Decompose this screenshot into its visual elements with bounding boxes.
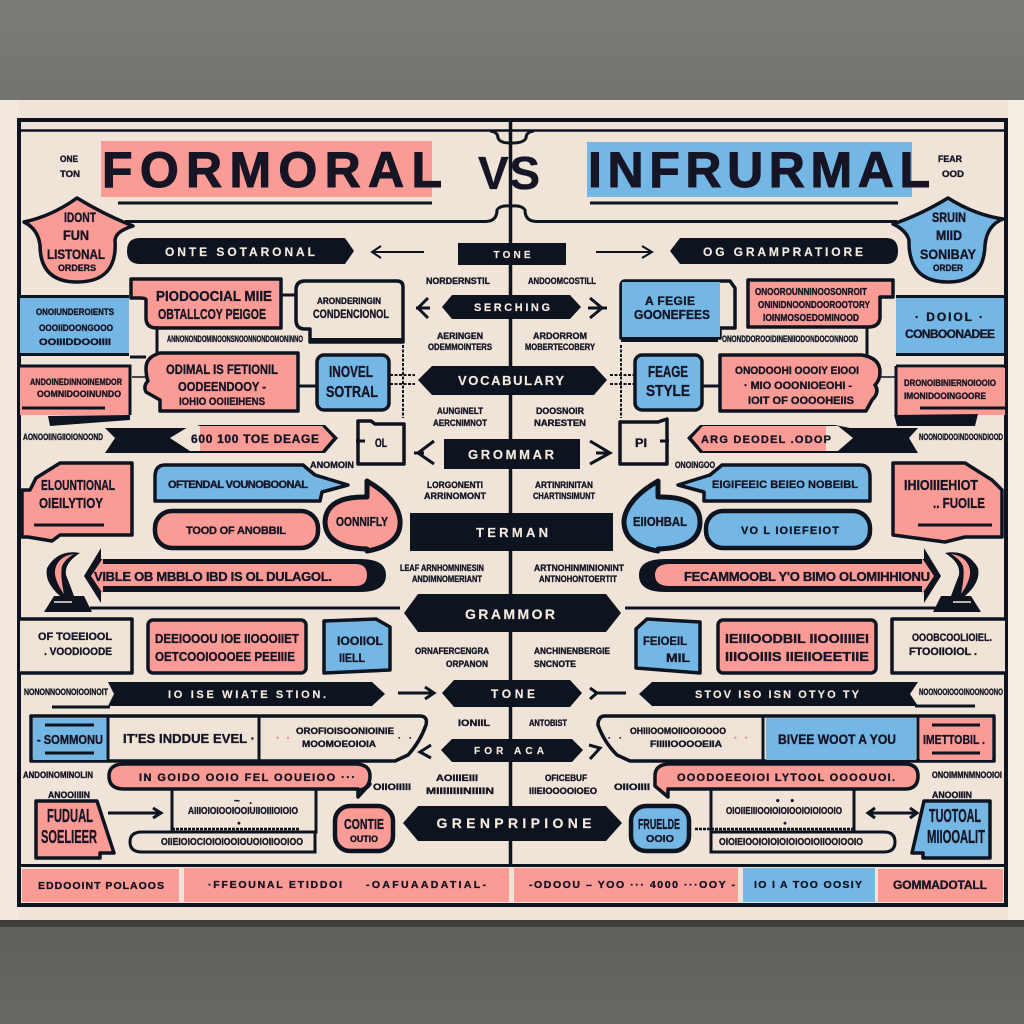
table row right: IMETTOBIL .: [923, 732, 985, 747]
center caption 3: [433, 406, 586, 428]
panel: blue note left: ONOIUNDEROIENTS: [36, 307, 114, 317]
center caption 5: ANTNOHONTOERTIT: [539, 574, 617, 584]
panel: blue tag row right: FEIOEIL: [643, 634, 687, 648]
flow box left: OIIEIOIOCIOIOIOOIOUOIOIIOOIOO: [161, 837, 303, 848]
title header bracket: [125, 131, 897, 222]
shield badge right: SONIBAY: [920, 246, 977, 262]
panel: pink note left: ANDOINEDINNOINEMDOR: [30, 377, 122, 387]
pink rounded tag: CONTIE: [344, 816, 384, 833]
corner note left: [60, 154, 80, 179]
chevron left of serching: [416, 298, 430, 318]
circular arrow badge right: [624, 481, 700, 551]
center caption 2: [428, 331, 595, 352]
panel: blue tag novel: INOVEL: [329, 364, 373, 381]
center caption 6: ORPANON: [446, 659, 488, 669]
ribbon right: ARG DEODEL .ODOP: [701, 434, 831, 446]
title: informal: INFRURMAL: [588, 142, 930, 198]
panel: informal example box: IOIT OF OOOOHEIIS: [748, 395, 854, 407]
ribbon lower right: [639, 682, 1003, 706]
dotted stub left: ANOMOIN: [310, 460, 354, 470]
panel: blue note left: OOOIIDOONGOOO: [39, 323, 113, 333]
flow box left: ~.: [234, 796, 252, 807]
panel: white note row left: OF TOEEIOOL: [38, 631, 112, 643]
title: vs: VS: [478, 147, 540, 199]
table row right: BIVEE WOOT A YOU: [778, 731, 896, 747]
panel: formal example box: [132, 353, 298, 411]
table row left: MOOMOEOIOIA: [302, 739, 377, 749]
panel: pink note row right: IIIOOIIIS IIEIIOEETIIE: [725, 649, 869, 664]
small box left: OL: [375, 436, 387, 450]
trapezoid tag right: ANOOIIIN: [932, 790, 972, 800]
center caption 7: IONIIL: [458, 718, 491, 728]
panel: blue phrase box right: [621, 281, 735, 342]
table row left: ··: [398, 733, 412, 743]
ribbon lower left: NONONNOONOIOOINOIT: [24, 687, 108, 697]
panel: white note row left: [20, 619, 132, 673]
center label: terman: [410, 513, 613, 551]
rule right: [625, 606, 940, 610]
center label: grammar: [444, 439, 580, 469]
footer bar: [20, 866, 1005, 902]
center label: grammar: GROMMAR: [468, 447, 555, 462]
center label: for aca: FOR ACA: [474, 746, 544, 757]
chevron right of for aca: [589, 745, 600, 759]
blue pill right: VO L IOIEFEIOT: [741, 525, 839, 537]
table row right: ··: [608, 733, 622, 743]
center label: grenpripione: [403, 806, 622, 841]
center label: vocabulary: VOCABULARY: [458, 373, 564, 388]
center caption 4: LORGONENTI: [427, 480, 483, 490]
pink pill lower left: ANDOINOMINOLIN: [23, 770, 93, 780]
trapezoid tag right: MIIOOALIT: [927, 827, 985, 847]
center label: for aca: [441, 739, 583, 762]
center caption 7: [458, 718, 567, 728]
footer cell 2: -OAFUAADATIAL-: [366, 879, 486, 891]
small box left: [356, 421, 404, 464]
panel: formal example box: ODIMAL IS FETIONIL: [166, 361, 278, 377]
shield badge left: FUN: [63, 227, 89, 243]
panel: blue tag row right: [636, 619, 700, 673]
footer cell 3: -ODOOU – YOO ··· 4000 ···OOY -: [529, 879, 736, 891]
panel: pink note row right: IEIIIOODBIL IIOOIIIIEI: [725, 631, 869, 646]
panel: pink note right: IMONIDOOINGOORE: [904, 391, 986, 401]
trapezoid tag left: ANOOIIIIN: [48, 790, 90, 800]
center label: grammor: [404, 594, 621, 632]
flow box right: OIOIEIOOIOIOIOIOIOOIOIIOOIOOIO: [719, 837, 863, 848]
blue rounded tag: OOIO: [646, 834, 674, 845]
table row right: FIIIIIOOOOEIIA: [650, 739, 723, 749]
corner note right: FEAR: [938, 154, 962, 164]
flow box right: •: [783, 818, 787, 828]
long arrow left: [84, 548, 386, 603]
panel: white note row right: FTOOIIOIOL .: [909, 646, 977, 658]
trapezoid tag left: FUDUAL: [47, 806, 93, 826]
icon: lamp left: [44, 552, 92, 612]
trapezoid tag left: SOELIEER: [41, 827, 97, 847]
long arrow right: FECAMMOOBL Y'O BIMO OLOMIHHIONU: [684, 569, 930, 584]
dashed connectors right: [610, 345, 634, 418]
ribbon left: [23, 425, 338, 453]
arrow left of tone: [372, 246, 424, 258]
panel: blue note right: CONBOONADEE: [905, 327, 995, 341]
panel: informal phrase box: ONOOROUNNINOOSONROIT: [755, 287, 867, 298]
ribbon left: 600 100 TOE DEAGE: [191, 432, 319, 446]
icon: lamp right: [933, 552, 981, 612]
panel: informal example box: · MIO OOONIOEOHI -: [744, 380, 852, 392]
flow box right: [695, 790, 895, 852]
blue speech shape left: [155, 465, 348, 501]
center caption 8: AOIIIEIII: [436, 773, 478, 783]
footer cell 1: EDDOOINT POLAOOS: [38, 880, 164, 892]
panel: white note row right: [892, 619, 1005, 673]
center caption 3: DOOSNOIR: [536, 406, 584, 416]
center caption 2: MOBERTECOBERY: [525, 342, 595, 352]
center caption 3: AUNGINELT: [437, 406, 483, 416]
center label: grammor: GRAMMOR: [465, 606, 555, 622]
table row left: IT'ES INDDUE EVEL ·: [123, 731, 255, 746]
table row right: [598, 716, 994, 761]
arrow right of lower tone: [590, 688, 626, 699]
panel: formal phrase box: PIODOOCIAL MIIE: [156, 288, 272, 305]
corner note right: OOD: [942, 169, 965, 179]
panel: informal example box: ONODOOHI OOOIY EIOOI: [735, 365, 859, 377]
footer cell 5: GOMMADOTALL: [893, 878, 987, 892]
corner note right: [938, 154, 965, 179]
connector right: [282, 295, 867, 355]
table row left: - SOMMONU: [37, 732, 103, 747]
panel: blue tag style: [635, 355, 720, 410]
flow box left: [130, 790, 316, 852]
center caption 5: ANDIMNOMERIANT: [412, 574, 482, 584]
panel: conditional note left: CONDENCIONOL: [313, 307, 389, 321]
connector left: [130, 326, 157, 357]
circular arrow badge right: EIIOHBAL: [633, 514, 687, 529]
dotted stub right: ONOINGOO: [675, 460, 715, 470]
panel: blue note right: [896, 296, 1005, 354]
table row right: ··: [734, 733, 748, 744]
panel: informal example box: [720, 355, 896, 411]
panel: informal phrase box: ONINIDNOONDOOROOTORY: [758, 300, 870, 311]
footer cell 1: [22, 869, 179, 902]
center caption 4: ARRINOMONT: [424, 491, 486, 501]
outer frame: [19, 120, 1006, 905]
center caption 5: ARTNOHINMINIONINT: [534, 563, 624, 573]
center caption 6: ANCHINENBERGIE: [534, 646, 610, 656]
heading pill left: ONTE SOTARONAL: [165, 245, 315, 259]
flow box left: •: [237, 818, 241, 828]
pink pill lower right: ONOIMMNMNOOIOI: [932, 770, 1002, 780]
panel: white note row left: . VOODIOODE: [44, 646, 112, 658]
table row right: OHIIIOOMOIIOOIOOOO: [630, 726, 726, 736]
dotted stub lower left: OIIOIIIII: [373, 782, 411, 792]
table row left: OROFIOISOONIOINIE: [296, 726, 394, 736]
circular arrow badge left: OONNIFLY: [336, 514, 388, 529]
center caption 6: SNCNOTE: [534, 659, 576, 669]
panel: conditional note left: [296, 281, 403, 342]
panel: blue note right: · DOIOL ·: [915, 310, 983, 324]
pink rounded tag: [335, 806, 393, 851]
corner note left: ONE: [60, 154, 78, 164]
shield badge right: SRUIN: [932, 209, 966, 225]
center label: serching: [442, 295, 581, 319]
pink pill left: TOOD OF ANOBBIL: [186, 525, 286, 537]
ribbon lower left: [24, 682, 385, 707]
shield badge left: [24, 198, 133, 282]
table row left: ··: [276, 733, 290, 744]
title: formal: FORMORAL: [102, 142, 442, 198]
flow box left: AIIIOIOIOOIOOIUIIOIIIOIOIO: [188, 806, 298, 817]
shield badge right: ORDER: [933, 263, 963, 273]
panel: blue tag style: STYLE: [646, 383, 690, 400]
panel: pink note row right: [718, 620, 876, 673]
center caption 8: OFICEBUF: [545, 773, 587, 783]
pink rounded tag: OUTIO: [350, 834, 378, 844]
arrow right of tone: [596, 246, 652, 258]
blue speech shape right: EIGIFEEIC BEIEO NOBEIBL: [712, 479, 858, 491]
callout box right: [893, 463, 1002, 542]
center caption 8: [426, 773, 597, 796]
panel: formal example box: IOHIO OOIIEIHENS: [179, 396, 265, 408]
blue pill right: [706, 511, 870, 548]
rule left: [90, 606, 400, 610]
center caption 8: MIIIIIIIINIIIIN: [426, 786, 494, 796]
corner note left: TON: [60, 169, 80, 179]
center caption 1: NORDERNSTIL: [426, 276, 490, 286]
panel: pink note row left: [148, 620, 306, 673]
ribbon left: AONOOIINGIIOIONOOND: [23, 432, 103, 442]
blue speech shape left: OFTENDAL VOUNOBOONAL: [168, 479, 308, 491]
footer cell 4: IO I A TOO OOSIY: [754, 879, 862, 891]
panel: blue phrase box right: GOONEFEES: [634, 307, 710, 322]
panel: pink note row left: OETCOOIOOOEE PEEIIIE: [155, 649, 295, 664]
arrow to flow box right: [868, 808, 917, 818]
panel: blue tag row left: IIELL: [339, 651, 365, 665]
panel: pink note left: OOMNIDOOINUNDO: [37, 389, 121, 399]
callout box left: [22, 463, 132, 541]
ribbon lower left: IO ISE WIATE STION.: [168, 689, 326, 701]
center caption 1: [426, 276, 596, 286]
center label: serching: SERCHING: [474, 302, 550, 314]
ribbon right: [687, 425, 1003, 453]
small box right: PI: [635, 436, 647, 450]
pink pill left: [155, 511, 318, 548]
center caption 4: ARTINRINITAN: [535, 480, 593, 490]
center label: tone: TONE: [494, 250, 531, 261]
callout box left: ELOUNTIONAL: [41, 477, 115, 494]
dashed connectors left: [390, 345, 415, 418]
panel: blue tag novel: [298, 355, 389, 410]
shield badge right: [893, 198, 1003, 282]
panel: informal phrase box: IOINMOSOEDOMINOOD: [763, 313, 859, 324]
panel: informal phrase box: [748, 280, 893, 327]
chevron left of for aca: [420, 745, 431, 758]
callout box left: OIEILYTIOY: [39, 495, 103, 512]
shield badge left: LISTONAL: [47, 246, 105, 262]
center caption 1: ANDOOMCOSTILL: [528, 276, 596, 286]
shield badge left: IDONT: [64, 209, 96, 225]
center label: tone lower: TONE: [491, 687, 535, 701]
arrow to flow box left: [108, 808, 161, 818]
table row left: [31, 716, 426, 761]
dotted caption left: ANNONONDOMINOONSNOONNONDOMONINNO: [167, 334, 303, 344]
center caption 2: ODEMMOINTERS: [428, 342, 492, 352]
panel: blue tag row left: IOOIIOL: [337, 634, 383, 648]
pink pill lower left: IN GOIDO OOIO FEL OOUEIOO ···: [139, 772, 355, 784]
center label: grenpripione: GRENPRIPIONE: [436, 815, 592, 831]
panel: blue tag novel: SOTRAL: [326, 384, 378, 401]
dotted stub lower right: OIIOIIII: [614, 782, 650, 792]
panel: conditional note left: ARONDERINGIN: [317, 296, 381, 306]
trapezoid tag right: TUOTOAL: [929, 806, 981, 826]
pink pill lower left: [23, 764, 370, 797]
panel: blue note left: [20, 296, 129, 354]
center caption 3: NARESTEN: [534, 418, 586, 428]
panel: blue phrase box right: A FEGIE: [645, 294, 695, 308]
center caption 7: ANTOBIST: [529, 718, 567, 728]
center label: terman: TERMAN: [476, 525, 548, 540]
center caption 4: [424, 480, 595, 501]
trapezoid tag right: [912, 790, 990, 858]
footer cell 3: [514, 868, 738, 902]
circular arrow badge left: [325, 481, 400, 551]
center label: vocabulary: [418, 366, 607, 395]
blue rounded tag: FRUELDE: [638, 816, 680, 833]
center label: tone lower: [442, 680, 582, 707]
center caption 5: [400, 563, 624, 584]
panel: pink note right: DRONOIBINIERNOIOOIO: [904, 378, 996, 388]
panel: blue tag row right: MIL: [666, 651, 690, 665]
panel: formal example box: OODEENDOOY -: [178, 379, 266, 394]
chevron left of grammar: [414, 441, 434, 464]
footer cell 4: [743, 868, 875, 902]
heading pill right: [670, 238, 898, 264]
blue rounded tag: [631, 806, 689, 851]
center label: tone: [458, 243, 566, 265]
flow box right: • •: [776, 796, 794, 807]
panel: formal phrase box: OBTALLCOY PEIGOE: [158, 306, 266, 323]
arrow left of lower tone: [398, 687, 434, 699]
panel: white note row right: OOOBCOOLIOIEL.: [912, 632, 992, 644]
center caption 4: CHARTINSIMUNT: [533, 491, 595, 501]
heading pill right: OG GRAMPRATIORE: [703, 245, 863, 259]
ribbon lower right: STOV ISO ISN OTYO TY: [695, 689, 860, 701]
panel: pink note left: [20, 366, 130, 426]
long arrow left: VIBLE OB MBBLO IBD IS OL DULAGOL.: [94, 569, 332, 584]
flow box right: OIOIIEIIIOOIOIOIOOIOIOIOOIO: [726, 806, 842, 817]
dotted caption right: ONONDDOROOIDINENIIODONDOCONNOOD: [722, 334, 858, 344]
center caption 8: IIIEIOOOOIOEO: [529, 786, 597, 796]
center caption 2: AERINGEN: [437, 331, 483, 341]
pink pill lower right: [655, 764, 1002, 797]
panel: blue note left: OOIIIDDOOIIII: [39, 337, 111, 347]
small box right: [620, 419, 669, 464]
shield badge right: MIID: [936, 227, 962, 243]
callout box right: IHIOIIIEHIOT: [904, 477, 978, 494]
center caption 6: [415, 646, 610, 669]
chevron right of serching: [588, 298, 607, 318]
panel: blue tag style: FEAGE: [648, 364, 688, 381]
pink pill lower right: OOODOEEOIOI LYTOOL OOOOUOI.: [677, 772, 895, 784]
center caption 3: AERCNIMNOT: [433, 418, 487, 428]
footer cell 2: ·FFEOUNAL ETIDDOI: [208, 879, 342, 891]
trapezoid tag left: [36, 790, 114, 858]
shield badge left: ORDERS: [58, 263, 96, 273]
panel: formal phrase box: [131, 279, 281, 328]
chevron right of grammar: [590, 441, 610, 464]
center caption 2: ARDORROM: [533, 331, 587, 341]
center caption 6: ORNAFERCENGRA: [415, 646, 489, 656]
footer cell 2: [184, 868, 509, 902]
heading pill left: [127, 238, 354, 264]
panel: pink note row left: DEEIOOOU IOE IIOOOIIET: [155, 631, 299, 646]
long arrow right: [639, 548, 941, 603]
footer cell 5: [878, 869, 1003, 902]
center caption 5: LEAF ARNHOMNINESIN: [400, 563, 484, 573]
callout box right: .. FUOILE: [933, 495, 985, 512]
panel: pink note right: [894, 366, 1005, 426]
panel: blue tag row left: [324, 619, 390, 673]
blue speech shape right: [678, 465, 870, 501]
